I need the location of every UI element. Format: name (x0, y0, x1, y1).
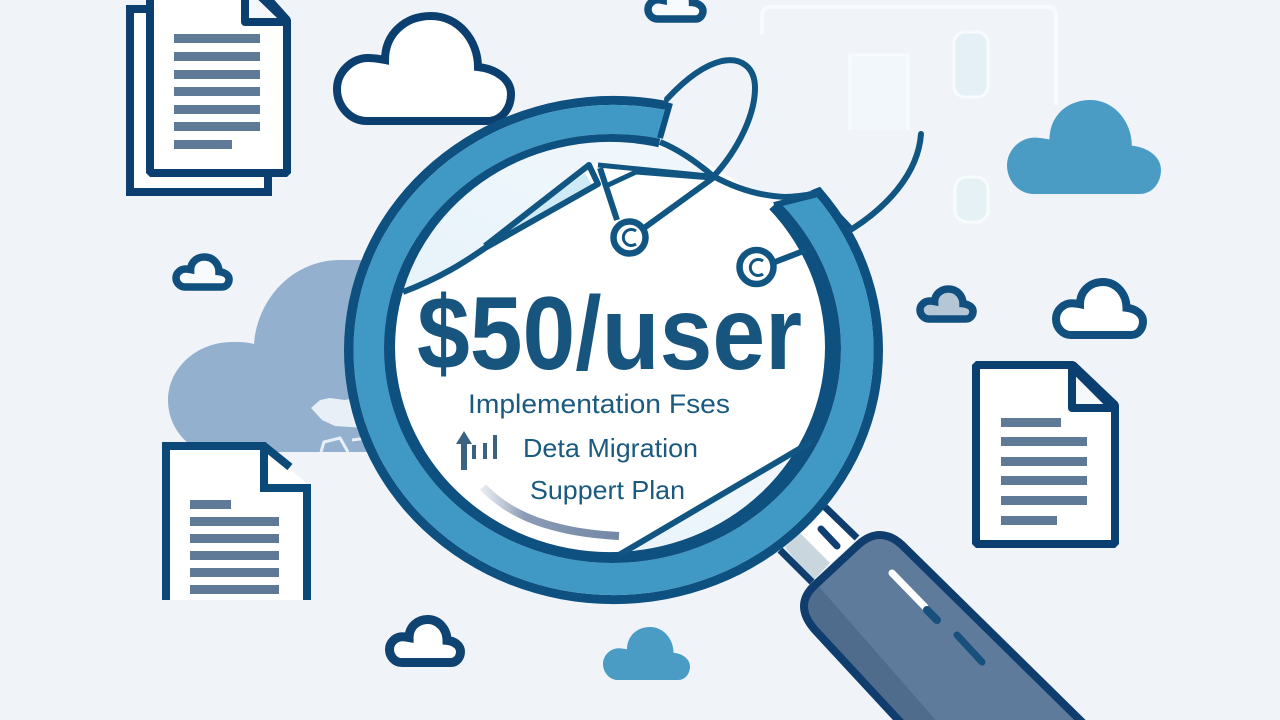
price headline: $50/user (417, 276, 802, 392)
ring cut edges (660, 103, 853, 231)
lens tint: top flap (404, 142, 704, 288)
cloud: small top centre (648, 0, 703, 19)
top paper flap (403, 165, 712, 292)
cloud: white bottom (390, 620, 460, 663)
magnifier handle (780, 507, 1085, 720)
magnifier ring (344, 96, 883, 604)
pin 2 (740, 250, 806, 284)
grip (804, 535, 1085, 720)
bottom paper flap (619, 442, 811, 555)
cloud: small grey right (920, 289, 973, 319)
pin 1 (600, 168, 713, 254)
label: implementation: Implementation Fses (468, 389, 730, 419)
label: support plan: Suppert Plan (530, 475, 685, 505)
ghost device outline (762, 7, 1056, 222)
cloud: white top (337, 16, 511, 121)
document: stacked top-left (130, 0, 287, 192)
progress arc (483, 487, 619, 536)
document: bottom-left (166, 446, 307, 600)
lens tint: bottom flap (632, 458, 790, 551)
label: data migration: Deta Migration (523, 433, 698, 463)
paper curl loop (667, 60, 755, 177)
cloud: blue top right (1007, 100, 1161, 194)
cloud: large muted background (168, 260, 420, 452)
lens glass (395, 138, 825, 552)
document: right (976, 365, 1115, 544)
neck (780, 507, 857, 582)
paper curl wave (660, 142, 820, 197)
cloud: small left (176, 257, 229, 287)
cloud: white right (1056, 282, 1143, 335)
icon: arrow and bars (456, 431, 497, 470)
curved lead to right (852, 134, 921, 229)
cloud: blue bottom (603, 627, 690, 680)
